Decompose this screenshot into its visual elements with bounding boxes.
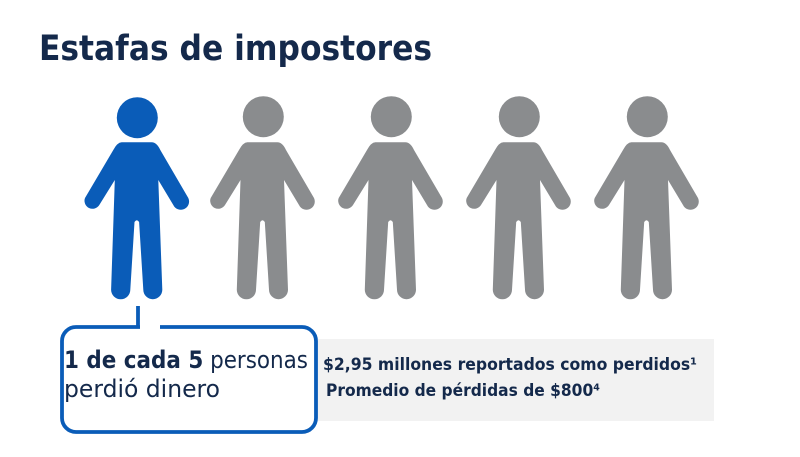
text: callout second line: perdió dinero <box>64 375 220 403</box>
icon: gray person 4 <box>466 96 571 299</box>
text: callout message: 1 de cada 5 personas <box>64 346 308 374</box>
icon: gray person 3 <box>338 96 443 299</box>
icon: gray person 2 <box>210 96 315 299</box>
title: Estafas de impostores <box>39 29 432 69</box>
icon: gray person 5 <box>594 96 699 299</box>
text: average loss: Promedio de pérdidas de $800⁴ <box>326 380 600 400</box>
text: amount reported lost: $2,95 millones reportados como perdidos¹ <box>323 354 697 374</box>
icon: highlighted person <box>84 97 189 299</box>
panel: loss statistics <box>318 339 714 421</box>
callout: 1 in 5 people <box>62 306 316 432</box>
